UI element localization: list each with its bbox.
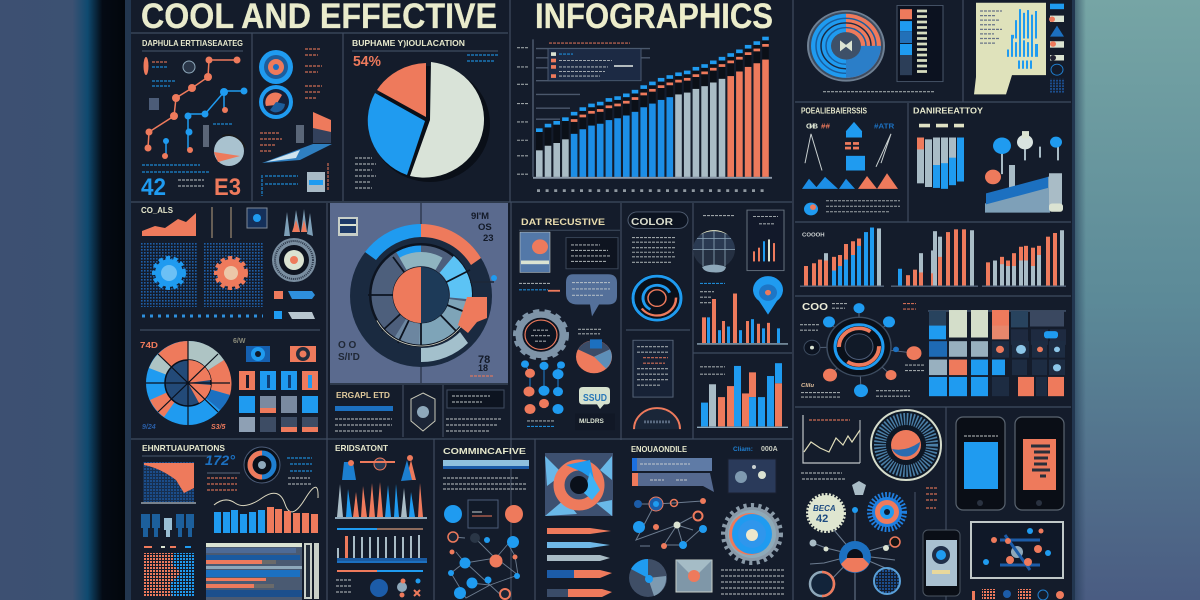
icon tiles [239,371,318,432]
coral wedge [458,297,487,333]
location pin [753,276,783,315]
device [728,459,776,493]
label [733,446,778,453]
laptop illustration [260,112,332,163]
panel: main bar chart [517,37,772,191]
spike chart [697,294,788,344]
lower pale arc [421,332,468,362]
mini document [262,163,328,196]
pie labels [355,55,498,188]
side icons [1049,4,1065,94]
SSUD bubble [579,387,610,409]
small phone [923,530,960,596]
globe [693,230,735,273]
corner number bottom right: 78 [478,354,490,366]
thin bar chart [337,535,427,563]
panel: network and stats [141,38,248,201]
caption [578,329,601,334]
stat: 53: E3 [214,174,241,201]
report bars [1007,9,1038,69]
paper [974,3,1046,94]
gear badge [516,312,566,358]
small pie [576,339,612,373]
barcode strips [304,543,319,599]
heading: DAT RECUSTIVE [521,217,605,228]
label: Cliam: [733,446,753,453]
target dial [272,238,316,282]
legend dashes [144,546,191,548]
stat labels [142,424,226,431]
pie chart [368,62,490,182]
corner number bottom left: O O [338,340,357,351]
text lines [335,419,392,431]
coral circle [505,505,523,523]
color pill [628,212,688,228]
area chart [142,213,196,236]
label: 6/W [233,338,246,345]
blue network chart [162,88,248,159]
wave line [214,487,318,512]
heading: POEALIEBAIERSSIS [801,107,867,116]
person highlight [164,518,172,537]
hub chart [804,303,922,397]
middle bar chart [898,229,974,286]
small labels: GHB [806,122,818,130]
link icons [246,346,316,362]
people icons [141,514,194,537]
pentagon icon [852,481,866,495]
color pill: COLOR [631,216,673,228]
blue icon [846,122,862,138]
panel: phones [923,417,1064,600]
rising area [985,173,1063,213]
status bars [632,458,714,492]
spiral ring chart [631,274,683,322]
baselines [800,285,1066,287]
bars [536,37,769,177]
bottom icons [972,589,1064,600]
heading: ERGAPL ETD [336,391,390,400]
left bar chart [804,228,881,286]
panel: globe and bars [693,210,788,344]
small labels: ## [821,122,831,130]
mountain chart [802,173,898,189]
lines and icons [336,578,420,598]
mini table [845,142,859,149]
badge: BECA [813,504,836,513]
corner number bottom right 2: 18 [478,363,488,373]
panel: fan and line chart [801,410,941,600]
badge [808,495,844,531]
blue stat: 172° [205,452,235,468]
labels [305,49,322,98]
radial chart [808,11,884,81]
small labels [806,122,895,130]
text lines [632,238,676,262]
panel: peaks [801,107,900,215]
panel: three bar charts [800,228,1066,286]
panel background [330,203,508,383]
dot grid with blue gear [141,242,198,307]
speech bubble [566,274,617,316]
labels: M/LDRS [579,418,604,425]
horizontal bars [206,543,302,600]
panel: data recursive [516,217,620,430]
small stats [519,283,560,291]
heading [703,215,735,217]
panel: coals [140,205,320,432]
stat labels: 9/24 [142,424,156,431]
envelope card [676,560,712,592]
spike chart [335,482,427,518]
stat: 42: 42 [141,174,166,201]
panel: pie chart [352,38,498,188]
heading: ERIDSATONT [335,443,389,453]
sunburst [872,497,902,527]
badge [411,393,435,431]
panel: eridsatont [335,443,427,598]
callout text [446,390,504,431]
pens [547,528,612,597]
heading: COO [802,301,828,313]
hub network [810,507,900,600]
mini card [338,217,358,236]
panel: donut icons and laptop [259,49,332,196]
text lines [443,478,527,489]
chart subtitle [549,42,630,44]
corner number top: 9I'M [471,211,489,222]
gauge [214,135,245,166]
ring chart [350,225,492,367]
stat: 54%: 54% [353,53,381,70]
heading: DAPHULA ERTTIASEAATEG [142,38,243,48]
panel frames [131,0,1071,600]
halftone area chart [141,462,196,503]
label: 000A [761,446,778,453]
top icons [212,207,313,238]
pointer dot [491,275,497,281]
panel: data reality [913,107,1063,213]
bar labels [919,124,964,128]
gear [725,507,779,561]
right bar chart [986,230,1064,286]
phone with coral chart [1015,417,1064,510]
legend column [897,6,943,82]
stat label: 74D [140,341,158,350]
corner number top 3: 23 [483,233,494,244]
caption [823,91,935,93]
icon row [342,455,416,481]
heading [700,367,725,374]
ring gauge [244,447,280,483]
heading: CO_ALS [141,205,173,215]
pins [985,131,1062,188]
bar chart [214,507,318,533]
labels [527,414,615,430]
blue circle [444,505,462,523]
blue target icon [259,50,293,84]
bar [443,460,529,469]
tile grid [928,310,1066,396]
panel: communicative [443,446,529,599]
blue spiral icon [259,85,293,119]
halftone map [143,553,194,597]
terminal card [633,340,673,397]
corner number bottom left 2: S/I'D [338,352,360,363]
labels [800,304,925,371]
badge: 42 [816,513,828,525]
stat labels: S3/5 [211,424,226,431]
legend chips [274,291,315,319]
label lines [207,458,312,490]
side labels [926,488,938,508]
pointer [470,281,494,283]
network [448,532,520,599]
baseline [533,177,772,179]
panel: central ring [330,203,508,383]
blue card [520,232,550,272]
monitor [971,522,1063,578]
panel: donut square and pens [545,453,613,597]
chart gridlines [533,39,650,177]
dashboard board [125,0,1075,600]
node network [521,360,565,414]
divider progress [337,570,423,572]
panel: paper report [974,3,1065,94]
text block [566,238,618,269]
text lines [721,570,785,594]
blue square [846,156,865,171]
report text [980,11,1002,43]
SSUD bubble: SSUD [583,392,607,404]
sub label [801,383,910,397]
footer icon and text [804,201,900,215]
progress bar [335,406,393,411]
panel: color [628,212,688,429]
panel: coloured bars [697,363,788,427]
y axis labels [517,48,529,174]
outer coral arc [421,224,481,265]
panel: evaluations [141,443,319,600]
stacked bars [917,138,964,189]
heading: DANIREEATTOY [913,107,984,116]
heading: COMMINCAFIVE [443,446,526,456]
progress bar [337,528,423,530]
line chart [803,415,860,463]
phone with blue grid [956,417,1005,510]
x axis labels [537,189,769,192]
labels [700,283,725,303]
panel: engage [335,390,504,431]
outer blue arc [365,224,421,260]
coral network chart [144,56,240,152]
legend box [548,49,641,81]
corner number top 2: OS [478,222,492,233]
small labels: #ATR [874,122,895,130]
radial segment chart [146,341,231,425]
sub label: Clilu [801,383,814,389]
heading: ENOUAONDILE [631,444,687,454]
square donut card [545,453,613,516]
heading: BUPHAME Y)IOULACATION [352,38,465,48]
heading: EHNRTUAUPATIONS [142,443,225,453]
line chart [805,134,891,171]
caption lines [801,473,846,479]
dot grid with coral gear [204,242,263,307]
gauge arc [634,408,680,429]
small coral caption [470,375,494,377]
fan dial [871,410,941,480]
panel: radial chart [808,6,943,92]
bars [701,363,782,426]
panel: endoandle [629,444,785,597]
mini bar chart box [747,210,784,271]
small labels [142,57,233,186]
network [633,497,707,549]
diagram box [468,500,498,528]
dash row [142,314,263,318]
heading: COOOH [802,233,825,239]
pie [629,559,667,597]
panel: coo hub [800,301,1066,397]
